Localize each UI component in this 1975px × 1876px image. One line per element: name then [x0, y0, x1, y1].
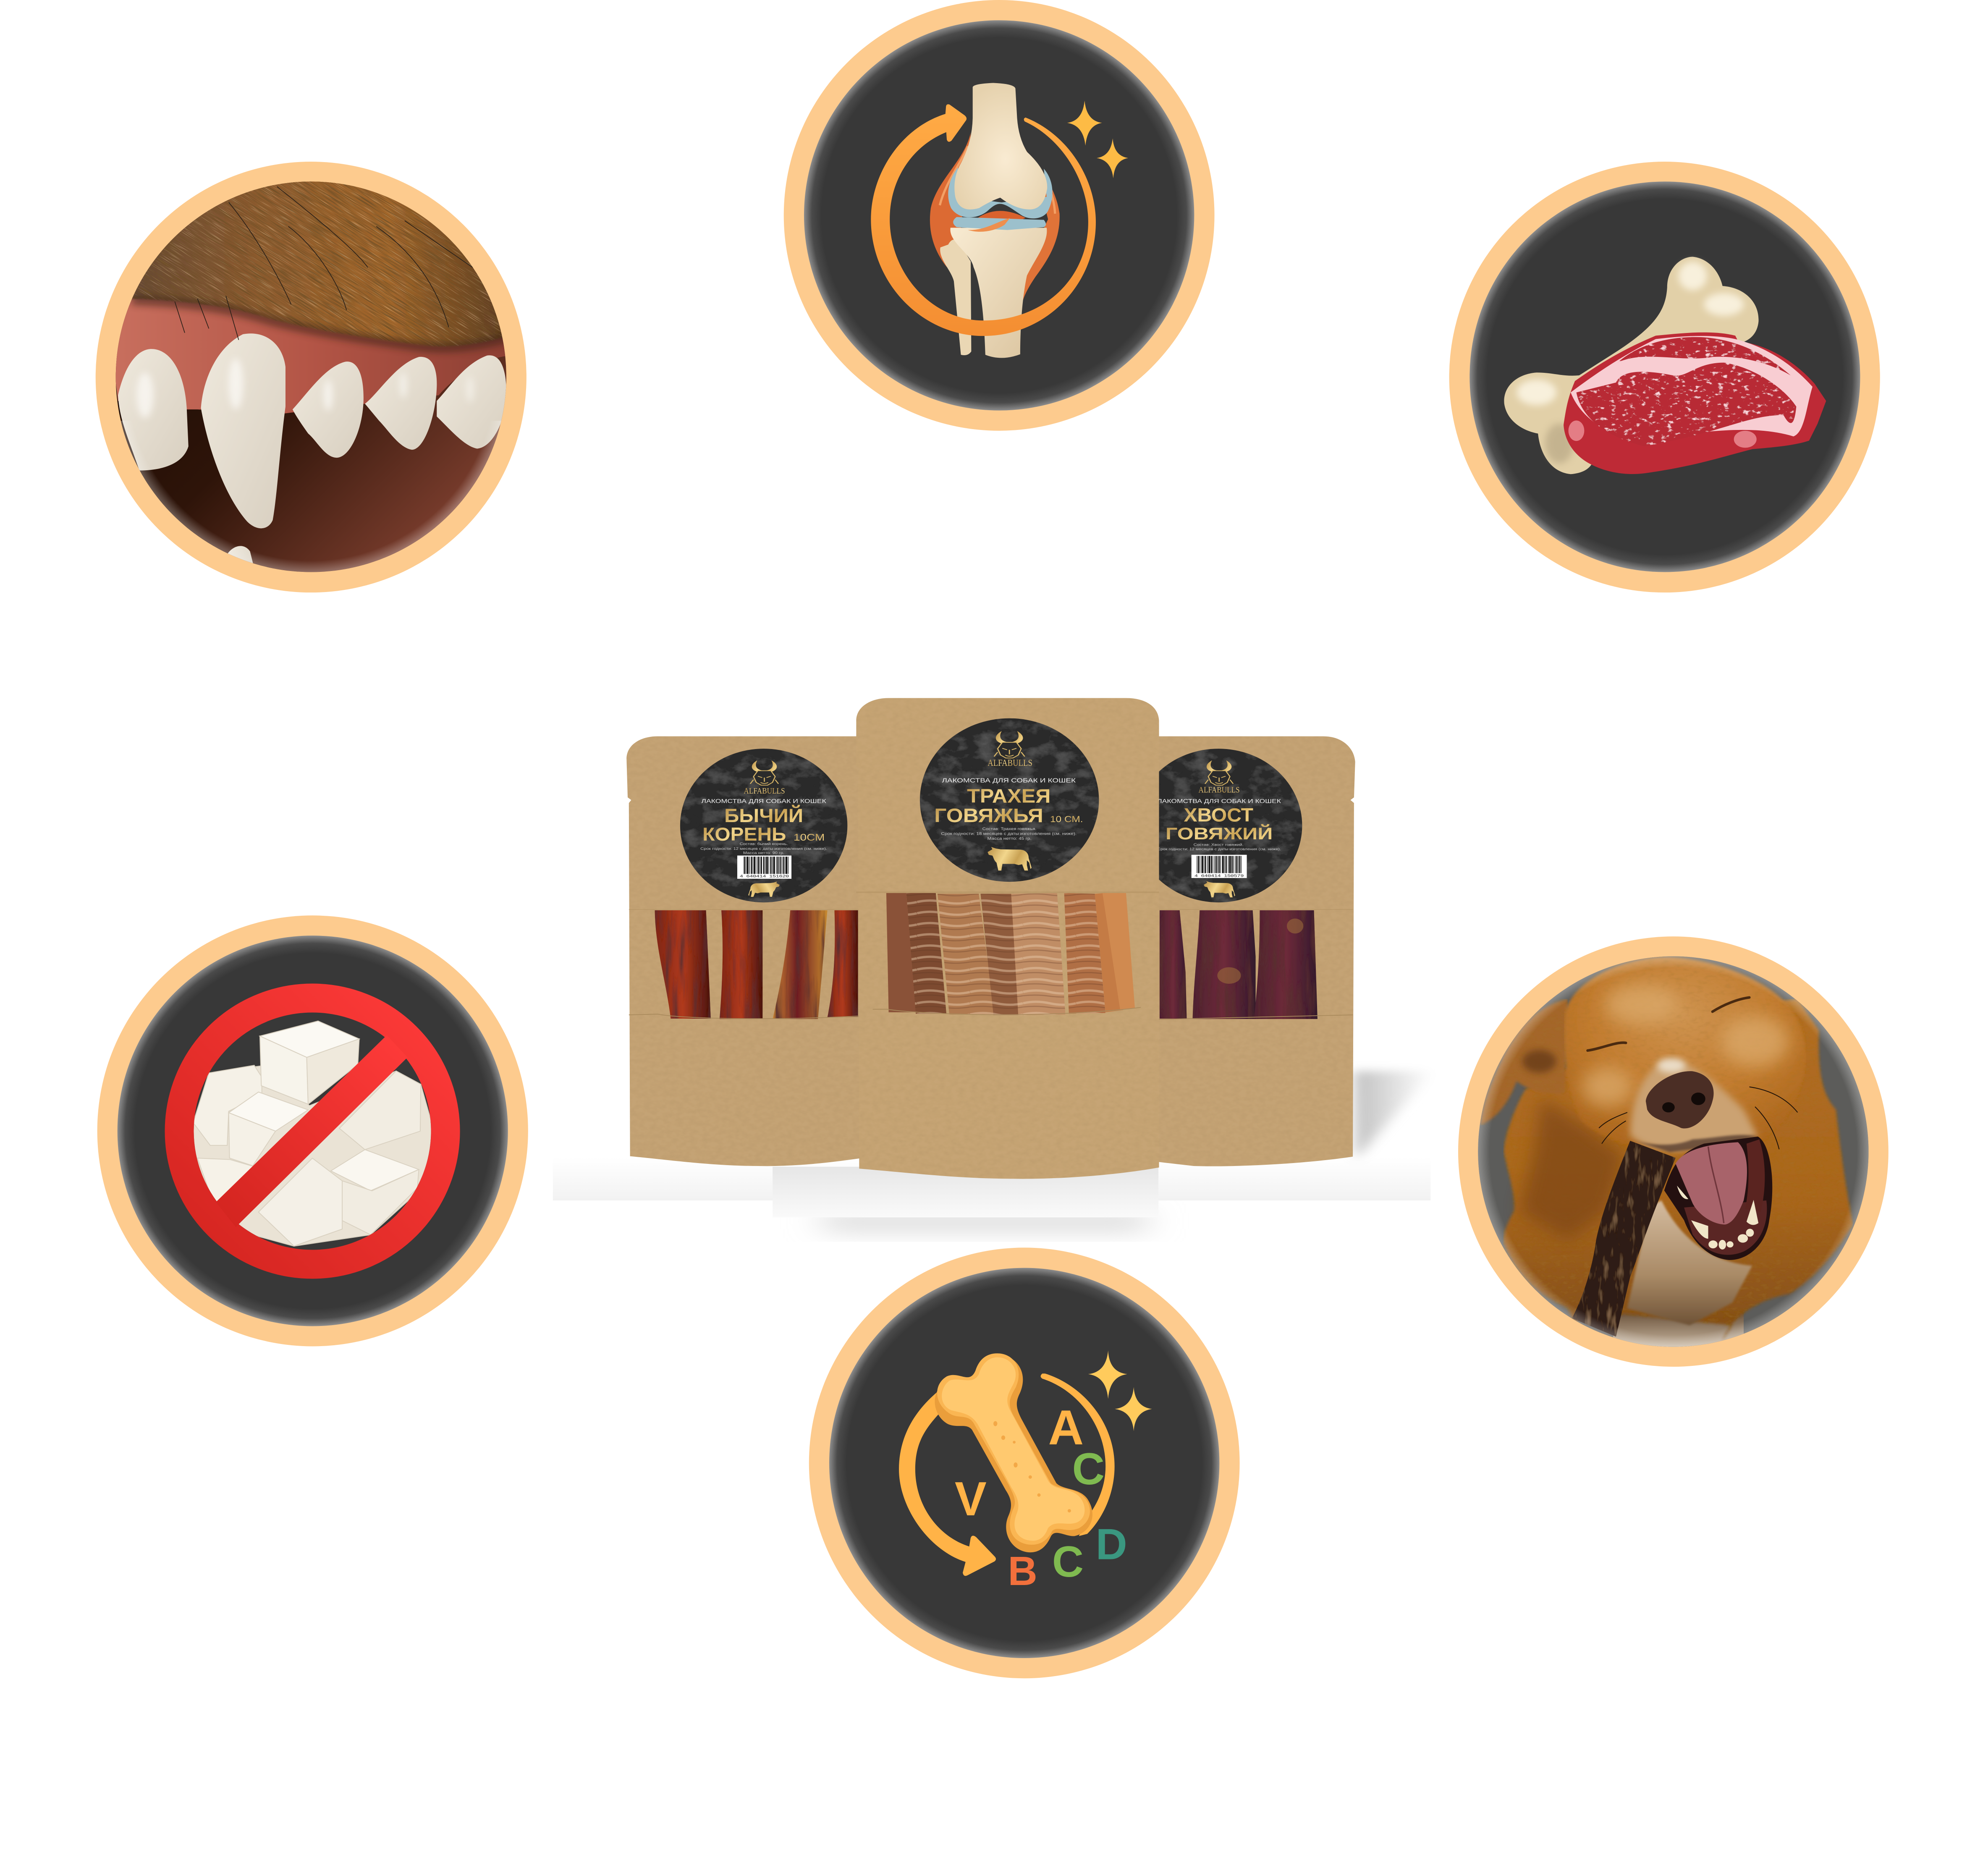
label centre: Срок годности: 18 месяцев с даты изготовления (см. ниже). [941, 832, 1077, 836]
vitamin letters: V [955, 1473, 987, 1526]
pouch window right [1158, 909, 1353, 1019]
logo left [750, 760, 778, 785]
label centre: ЛАКОМСТВА ДЛЯ СОБАК И КОШЕК [942, 777, 1076, 783]
label left: БЫЧИЙ [724, 805, 803, 826]
fur [129, 181, 504, 356]
icon: steak [1564, 333, 1826, 474]
floor and shadows [553, 1071, 1433, 1231]
muscles [930, 132, 971, 267]
label centre: ALFABULLS [988, 758, 1032, 768]
label left: Срок годности: 12 месяцев с даты изготовления (см. ниже). [700, 847, 827, 851]
label right [1135, 749, 1302, 902]
label centre [920, 718, 1099, 882]
icon: bone [935, 1353, 1092, 1552]
label centre: Масса нетто: 45 гр. [988, 836, 1032, 841]
label right: ALFABULLS [1199, 785, 1240, 794]
whiskers [175, 186, 473, 340]
label right: ЛАКОМСТВА ДЛЯ СОБАК И КОШЕК [1157, 798, 1281, 804]
label left: КОРЕНЬ [702, 824, 786, 845]
lower bones [940, 239, 971, 355]
dog ear [1480, 999, 1568, 1125]
label left [680, 749, 847, 902]
muzzle [1630, 1059, 1758, 1152]
neck shadow [1519, 1098, 1624, 1240]
label centre: Состав: Трахея говяжья. [982, 827, 1037, 831]
vitamin letters [955, 1400, 1127, 1594]
arrow ring [871, 104, 1096, 336]
product group: three kraft pouches [553, 698, 1433, 1231]
vitamin letters: C [1052, 1537, 1084, 1586]
circle: dog chewing treat [1458, 936, 1889, 1367]
icon: bone [1504, 257, 1759, 474]
barcode right [1192, 855, 1247, 878]
logo centre [994, 731, 1025, 758]
chest [1627, 1200, 1752, 1325]
steak marbled muscle [1576, 337, 1796, 446]
circle: meat and bone [1449, 162, 1880, 592]
icon: vitamin cycle arrows [899, 1373, 1115, 1576]
label centre: ТРАХЕЯ [967, 785, 1050, 807]
pouch body centre [856, 698, 1159, 1179]
label right: ХВОСТ [1184, 804, 1253, 825]
sparkles [1067, 101, 1128, 178]
barcode left: 4 640414 151620 [740, 874, 789, 878]
closed eyes [1587, 998, 1750, 1051]
vitamin letters: B [1008, 1548, 1037, 1594]
barcode right: 4 640414 150579 [1194, 874, 1244, 878]
pouch body right [1135, 736, 1355, 1166]
pouch: right, beef tail [1135, 736, 1355, 1166]
vitamin letters: C [1072, 1444, 1105, 1494]
circle: strong dog teeth [96, 162, 526, 593]
pouch body left [626, 736, 864, 1166]
dog head [1564, 957, 1806, 1155]
dog body [1504, 999, 1853, 1341]
open mouth [1664, 1137, 1772, 1260]
pouch: centre, beef trachea [856, 698, 1159, 1179]
tongue [1676, 1142, 1747, 1224]
icon: knee joint [871, 83, 1128, 358]
cartilage [948, 167, 1053, 218]
label left: 10СМ [794, 832, 825, 843]
vitamin letters: D [1096, 1520, 1127, 1568]
pouch: left, bull pizzle [626, 736, 864, 1166]
nose [1646, 1071, 1714, 1129]
label left: Масса нетто: 90 гр. [743, 851, 784, 855]
circle: knee joint recovery [784, 0, 1215, 431]
steak fat [1571, 336, 1813, 441]
circle: no sugar [97, 915, 528, 1346]
femur [954, 83, 1047, 210]
label left: Состав: бычий корень. [740, 842, 788, 846]
pouch window left [629, 909, 859, 1019]
pouch window centre with trachea sticks [856, 891, 1159, 1015]
icon: prohibition sign [179, 998, 445, 1264]
label right: ГОВЯЖИЙ [1166, 824, 1273, 843]
label left: ЛАКОМСТВА ДЛЯ СОБАК И КОШЕК [701, 798, 827, 804]
barcode left [737, 856, 791, 879]
label centre: ГОВЯЖЬЯ [934, 804, 1043, 826]
circle: vitamins [809, 1247, 1240, 1678]
label centre: 10 СМ. [1050, 814, 1083, 824]
sparkles [1088, 1351, 1152, 1431]
label right: Состав: Хвост говяжий. [1194, 843, 1244, 847]
gums [113, 293, 510, 414]
teeth [118, 333, 506, 569]
icon: sugar cubes [193, 1021, 432, 1246]
label left: ALFABULLS [744, 786, 785, 796]
label right: Срок годности: 12 месяцев с даты изготовления (см. ниже). [1157, 847, 1281, 851]
chew stick [1572, 1141, 1676, 1336]
whiskers [1599, 1087, 1797, 1149]
vitamin letters: A [1048, 1400, 1084, 1455]
logo right [1205, 760, 1233, 785]
dog teeth [1677, 1186, 1758, 1239]
